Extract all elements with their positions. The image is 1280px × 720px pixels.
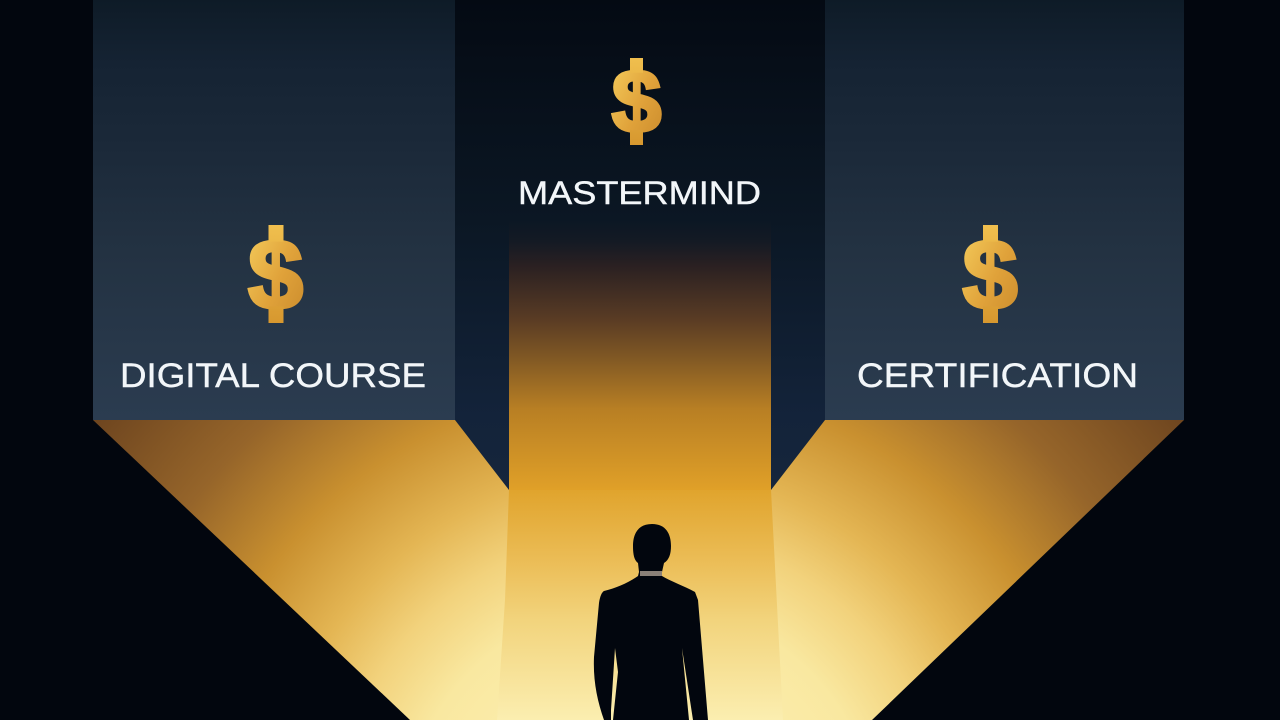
label: certification: CERTIFICATION bbox=[857, 357, 1138, 395]
silhouette: man from behind bbox=[594, 524, 708, 720]
label: digital course: DIGITAL COURSE bbox=[120, 357, 426, 395]
icon: gold dollar center: $ bbox=[611, 52, 662, 152]
right light floor bbox=[771, 420, 1184, 720]
label: mastermind: MASTERMIND bbox=[518, 175, 761, 211]
icon: gold dollar right: $ bbox=[962, 219, 1018, 331]
panel: mastermind bbox=[518, 52, 761, 211]
panel: certification bbox=[825, 0, 1184, 420]
center back wall glow bbox=[509, 220, 771, 490]
collar bbox=[640, 571, 662, 576]
left light floor bbox=[93, 420, 509, 720]
center light floor bbox=[497, 490, 783, 720]
center column and side walls bbox=[455, 0, 825, 490]
icon: gold dollar left: $ bbox=[248, 219, 303, 331]
panel: digital course bbox=[93, 0, 455, 420]
